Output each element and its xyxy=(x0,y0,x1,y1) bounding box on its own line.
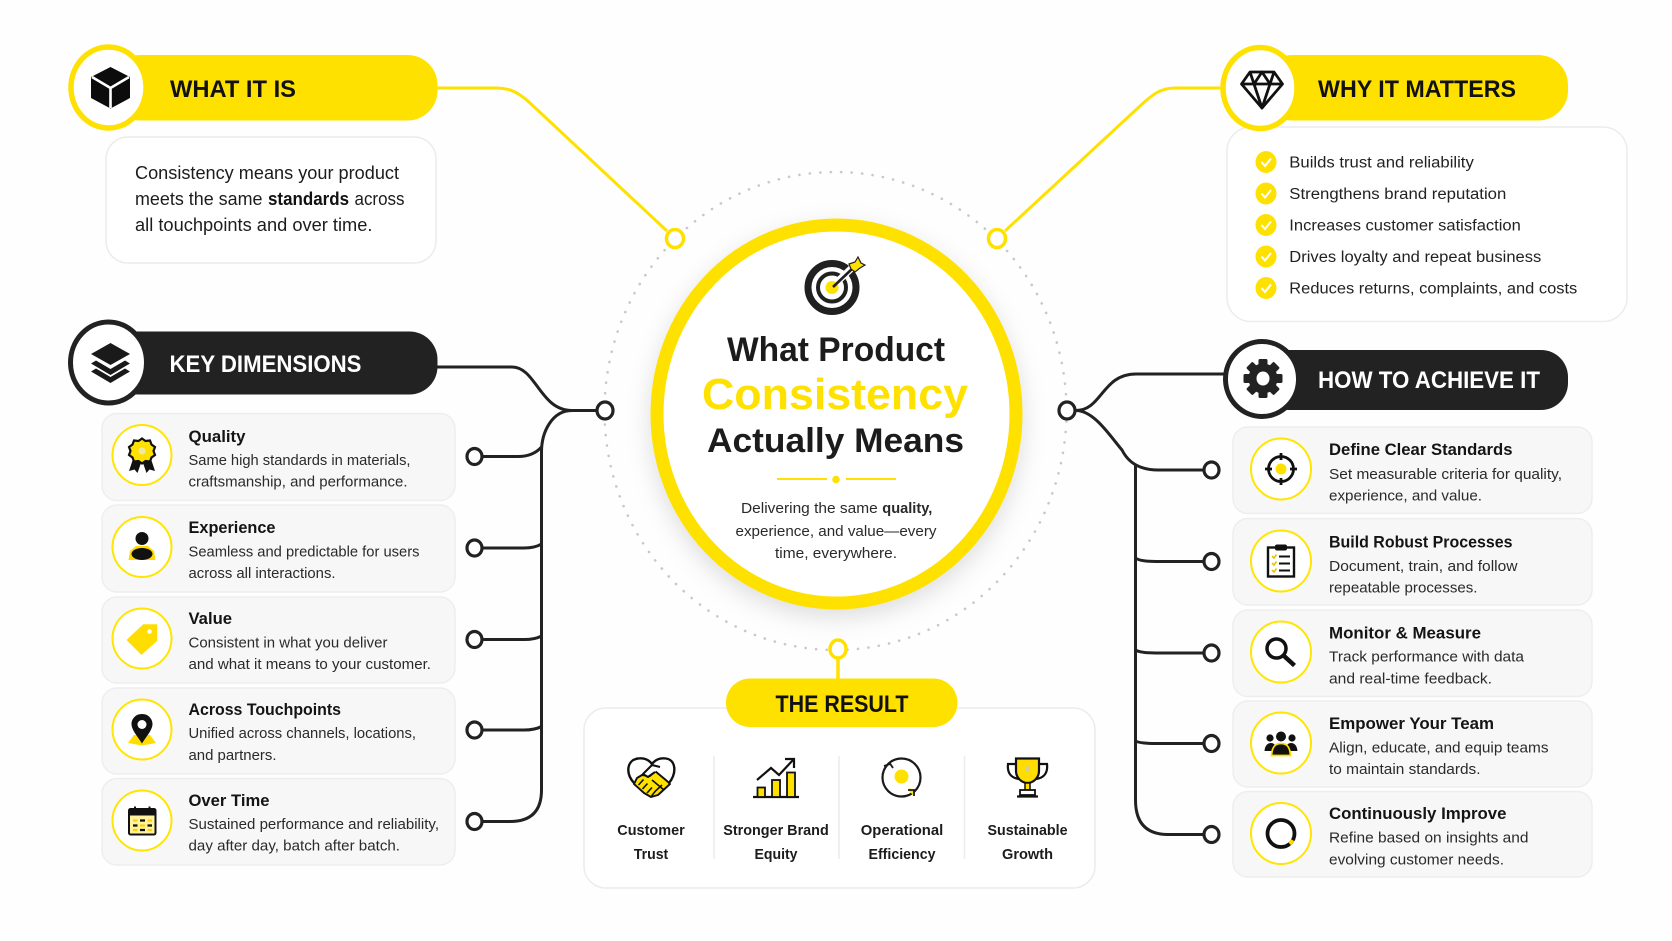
card: monitor and measure: Monitor & Measure xyxy=(1329,624,1481,642)
orbit node: upper right xyxy=(988,230,1006,248)
result header pill xyxy=(726,678,958,727)
icon: gear xyxy=(1244,359,1282,398)
list item: trust: Builds trust and reliability xyxy=(1289,154,1474,172)
icon: diamond xyxy=(1242,72,1282,108)
result: customer trust: Trust xyxy=(634,846,668,863)
result: customer trust xyxy=(617,758,685,863)
centre description: quality, xyxy=(882,500,932,517)
card: across touchpoints: Across Touchpoints xyxy=(188,701,341,719)
icon: growth chart xyxy=(753,759,799,797)
how to achieve icon circle xyxy=(1226,342,1298,416)
list item: returns: Reduces returns, complaints, and costs xyxy=(1289,280,1578,298)
card: value: and what it means to your customer. xyxy=(188,657,431,673)
list item: returns xyxy=(1256,277,1578,299)
what it is text card: meets the same xyxy=(135,189,262,209)
connector: result to centre xyxy=(836,656,840,680)
what it is text card: Consistency means your product xyxy=(135,163,399,183)
icon: layers xyxy=(91,343,130,383)
title divider xyxy=(777,476,896,483)
what it is text card: all touchpoints and over time. xyxy=(135,215,372,235)
title line 2: Consistency xyxy=(702,370,969,419)
what it is text card xyxy=(106,137,436,263)
result: customer trust: Customer xyxy=(617,822,685,839)
connector: how to achieve to centre xyxy=(1076,374,1226,410)
orbit node: bottom xyxy=(830,640,846,658)
panel: how to achieve header xyxy=(1226,342,1568,416)
card: build robust processes xyxy=(1233,518,1592,605)
card: over time: Sustained performance and reliability, xyxy=(188,817,439,833)
list item: reputation: Strengthens brand reputation xyxy=(1289,186,1506,203)
result heading: THE RESULT xyxy=(776,691,909,718)
card: build robust processes: Document, train, and follow xyxy=(1329,559,1518,575)
card: monitor and measure xyxy=(1233,610,1592,696)
card: empower your team: Empower Your Team xyxy=(1329,715,1494,733)
why it matters header pill xyxy=(1262,55,1568,120)
why it matters icon circle xyxy=(1223,48,1297,128)
result: operational efficiency: Operational xyxy=(861,822,943,839)
key dimensions heading: KEY DIMENSIONS xyxy=(170,351,362,378)
list item: trust xyxy=(1256,151,1474,173)
card: experience: Seamless and predictable for users xyxy=(188,544,420,560)
card: across touchpoints: Unified across channels, locations, xyxy=(188,726,416,742)
panel: central title circle xyxy=(657,225,1016,603)
card: value: Consistent in what you deliver xyxy=(188,636,388,652)
result: sustainable growth xyxy=(988,758,1068,863)
card: over time xyxy=(102,778,455,865)
dotted orbit ring xyxy=(604,172,1066,650)
panel: key dimensions header xyxy=(70,322,438,403)
card: continuously improve xyxy=(1233,792,1592,877)
connector: key dimensions trunk xyxy=(467,410,572,830)
title line 3: Actually Means xyxy=(707,422,964,460)
icon: box xyxy=(91,67,130,108)
icon: improvement loop xyxy=(1268,820,1294,847)
why it matters list card xyxy=(1227,127,1627,322)
title line 1: What Product xyxy=(727,331,945,369)
card: monitor and measure: and real-time feedback. xyxy=(1329,672,1492,688)
icon: clipboard xyxy=(1268,544,1294,576)
icon: calendar xyxy=(129,806,156,834)
list item: satisfaction xyxy=(1256,214,1521,236)
card: quality: Same high standards in materials, xyxy=(188,453,410,469)
how to achieve heading: HOW TO ACHIEVE IT xyxy=(1318,367,1540,394)
icon: team xyxy=(1264,732,1298,756)
card: define clear standards xyxy=(1233,427,1592,514)
what it is text card: across xyxy=(354,189,404,209)
result: stronger brand equity: Equity xyxy=(754,846,798,863)
list item: loyalty xyxy=(1256,246,1542,268)
card: experience xyxy=(102,505,455,592)
centre description: Delivering the same xyxy=(741,500,878,517)
list item: reputation xyxy=(1256,182,1506,204)
icon: magnifier xyxy=(1267,639,1294,666)
card: empower your team: to maintain standards. xyxy=(1329,762,1480,778)
connector: what it is to centre xyxy=(437,88,667,231)
connector: how to achieve trunk xyxy=(1076,410,1219,842)
centre description: experience, and value—every xyxy=(736,523,937,540)
card: quality: craftsmanship, and performance. xyxy=(188,474,408,490)
card: empower your team: Align, educate, and equip teams xyxy=(1329,740,1548,756)
result: operational efficiency: Efficiency xyxy=(868,846,936,863)
connector: why it matters to centre xyxy=(1005,88,1221,231)
list item: satisfaction: Increases customer satisfaction xyxy=(1289,218,1521,234)
card: continuously improve: Continuously Improve xyxy=(1329,805,1506,823)
panel: the result xyxy=(584,678,1095,888)
card: empower your team xyxy=(1233,701,1592,787)
card: quality xyxy=(102,414,455,500)
card: build robust processes: repeatable processes. xyxy=(1329,580,1478,596)
centre description: time, everywhere. xyxy=(775,545,897,562)
what it is heading: WHAT IT IS xyxy=(170,76,296,103)
result: stronger brand equity: Stronger Brand xyxy=(723,822,829,839)
card: across touchpoints xyxy=(102,688,455,774)
icon: price tag xyxy=(128,625,156,654)
card: build robust processes: Build Robust Processes xyxy=(1329,534,1512,552)
card: monitor and measure: Track performance with data xyxy=(1329,650,1525,666)
list item: loyalty: Drives loyalty and repeat business xyxy=(1289,249,1542,266)
icon: trophy xyxy=(1008,758,1047,796)
icon: crosshair xyxy=(1265,453,1297,485)
centre description xyxy=(736,500,937,562)
icon: person xyxy=(128,532,156,560)
result: sustainable growth: Sustainable xyxy=(988,822,1068,839)
panel: what it is xyxy=(71,47,438,263)
orbit node: left xyxy=(597,402,613,419)
why it matters heading: WHY IT MATTERS xyxy=(1318,76,1516,103)
card: define clear standards: experience, and value. xyxy=(1329,488,1482,504)
card: value xyxy=(102,597,455,683)
result: stronger brand equity xyxy=(723,759,829,863)
card: define clear standards: Define Clear Standards xyxy=(1329,441,1512,459)
icon: target with arrow xyxy=(808,257,865,312)
panel: why it matters xyxy=(1223,48,1627,322)
card: value: Value xyxy=(188,610,232,628)
card: over time: day after day, batch after batch. xyxy=(188,838,400,854)
result: operational efficiency xyxy=(861,758,943,863)
card: continuously improve: Refine based on insights and xyxy=(1329,830,1528,846)
card: over time: Over Time xyxy=(188,792,270,810)
what it is text card: standards xyxy=(268,189,349,209)
card: quality: Quality xyxy=(188,428,246,446)
connector: key dimensions to centre xyxy=(437,367,597,410)
icon: handshake heart xyxy=(628,758,674,797)
icon: rosette xyxy=(129,438,155,473)
key dimensions icon circle xyxy=(70,322,146,403)
card: across touchpoints: and partners. xyxy=(188,748,276,764)
what it is icon circle xyxy=(71,47,146,128)
result: sustainable growth: Growth xyxy=(1002,846,1053,863)
card: define clear standards: Set measurable criteria for quality, xyxy=(1329,467,1562,483)
icon: map pin xyxy=(128,714,156,746)
icon: orbit xyxy=(882,758,920,796)
what it is header pill xyxy=(110,55,438,120)
card: continuously improve: evolving customer needs. xyxy=(1329,852,1504,868)
orbit node: upper left xyxy=(666,230,684,248)
card: experience: Experience xyxy=(188,519,276,537)
orbit node: right xyxy=(1059,402,1075,419)
card: experience: across all interactions. xyxy=(188,566,336,582)
